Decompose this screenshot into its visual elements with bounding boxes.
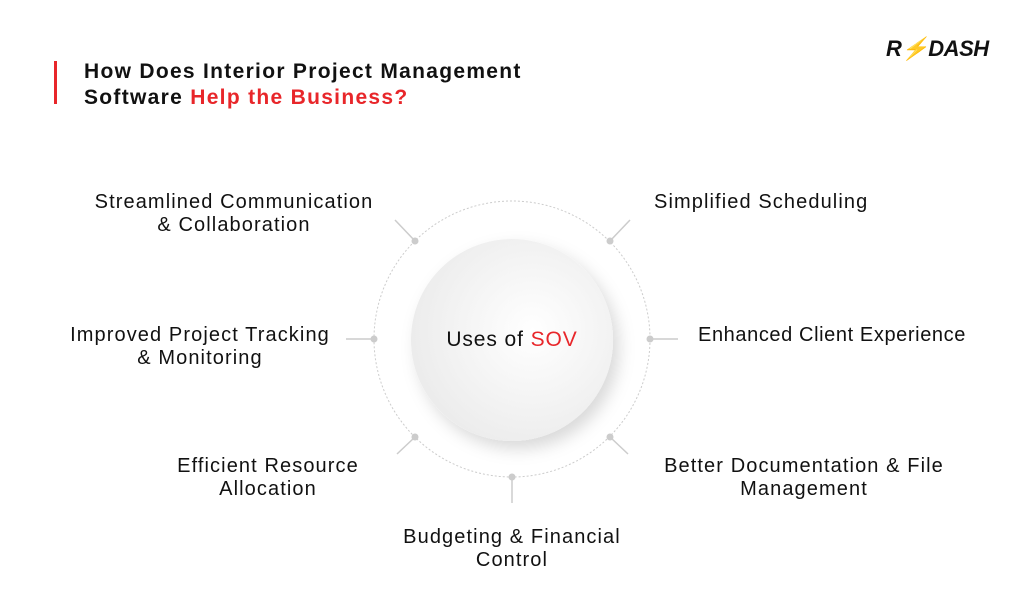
item: documentation: Management	[740, 478, 868, 500]
logo: R⚡DASH	[886, 36, 989, 61]
item: scheduling: Simplified Scheduling	[654, 191, 868, 213]
item: client: Enhanced Client Experience	[698, 324, 966, 346]
item: budgeting: Budgeting & Financial	[403, 526, 621, 548]
item: budgeting	[403, 526, 621, 571]
item: communication: & Collaboration	[157, 214, 311, 236]
item: resource	[177, 455, 359, 500]
item: documentation	[664, 455, 944, 500]
title	[84, 60, 522, 109]
item: resource: Allocation	[219, 478, 317, 500]
title accent bar	[54, 61, 57, 104]
item: tracking: Improved Project Tracking	[70, 324, 330, 346]
item: documentation: Better Documentation & File	[664, 455, 944, 477]
item: communication	[95, 191, 373, 236]
item: resource: Efficient Resource	[177, 455, 359, 477]
center label: Uses of SOV	[446, 328, 578, 351]
item: tracking: & Monitoring	[137, 347, 263, 369]
title: How Does Interior Project Management	[84, 60, 522, 83]
item: communication: Streamlined Communication	[95, 191, 373, 213]
title: Software Help the Business?	[84, 86, 409, 109]
item: tracking	[70, 324, 330, 369]
item: budgeting: Control	[476, 549, 548, 571]
